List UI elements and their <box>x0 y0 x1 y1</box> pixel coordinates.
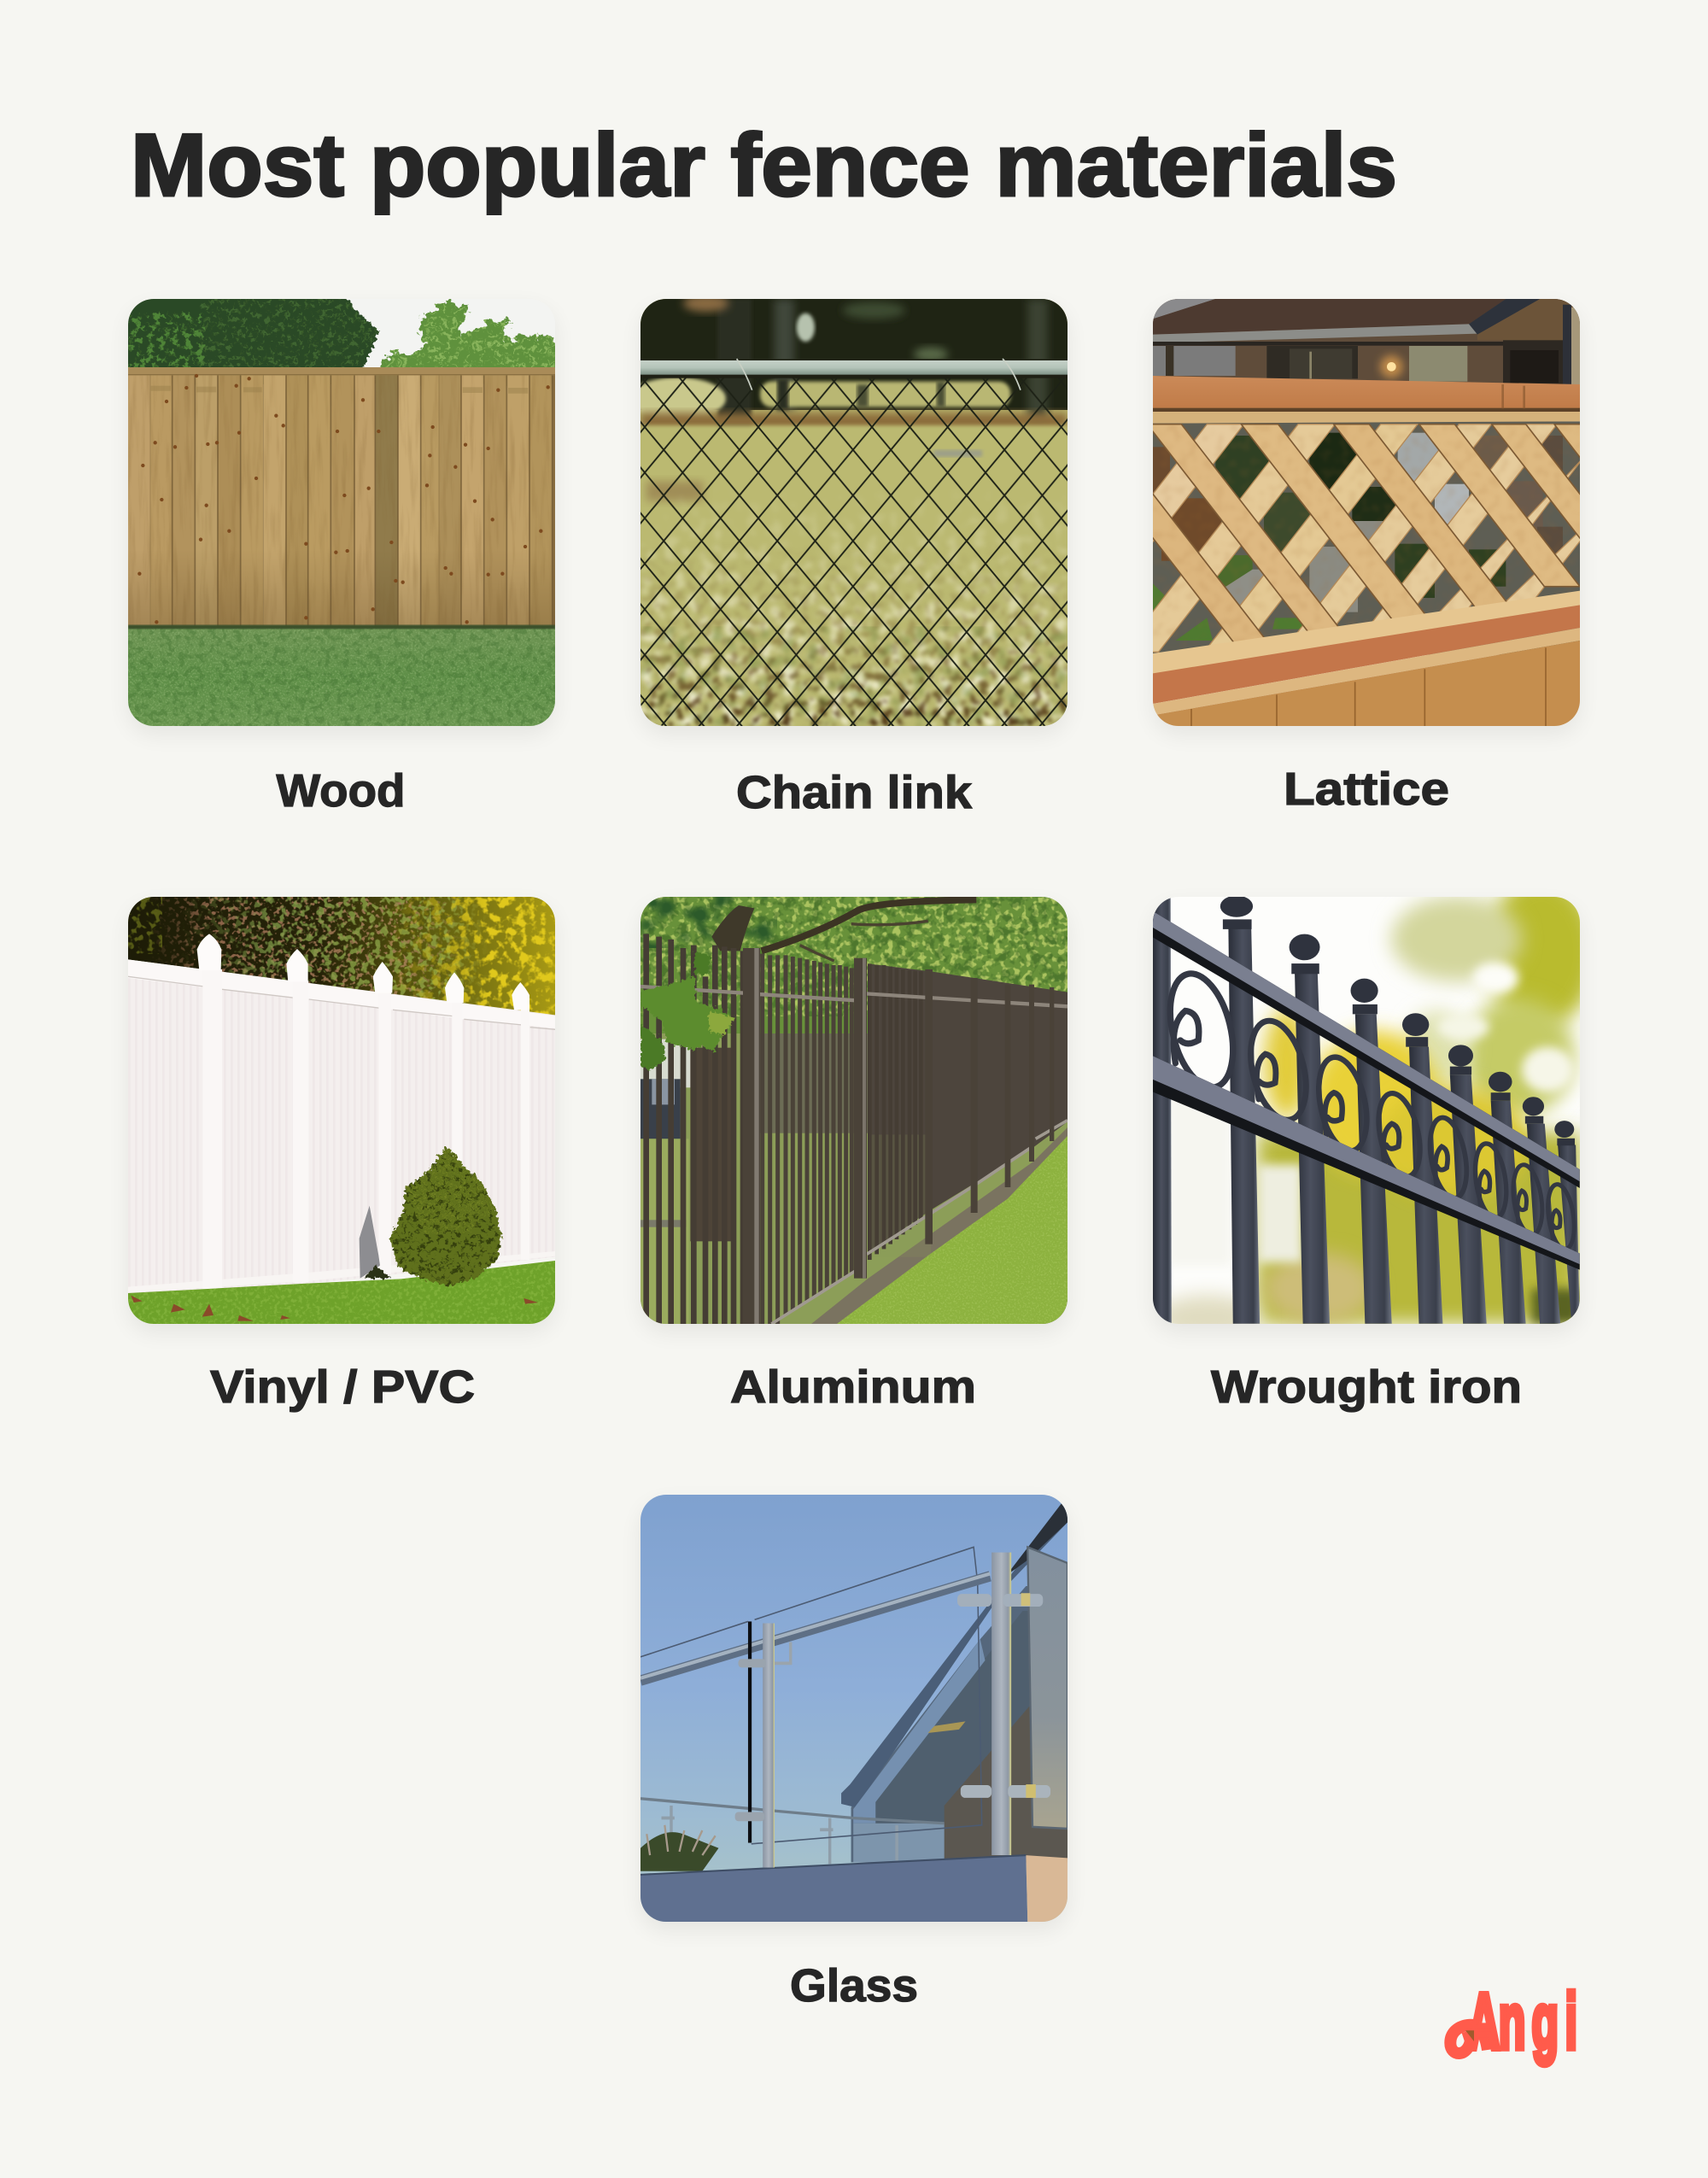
upper rail <box>1153 911 1580 1188</box>
fence posts and caps <box>197 934 529 1291</box>
lattice grain <box>1153 424 1580 652</box>
foliage <box>128 897 555 1019</box>
light trees <box>370 301 566 384</box>
lattice boards running up-right <box>1031 421 1642 652</box>
photo: wood fence <box>128 299 555 726</box>
blurred background <box>629 295 1068 726</box>
sky <box>640 1495 1068 1922</box>
lawn <box>128 1261 555 1324</box>
photo: lattice fence <box>1153 299 1580 726</box>
panel: vinyl fence <box>128 897 555 1413</box>
label: Glass: Glass <box>790 1960 918 2011</box>
scrolls <box>1160 967 1578 1251</box>
wood knots <box>139 376 548 622</box>
panel: chain link fence <box>640 299 1068 818</box>
photo: wrought iron fence <box>1153 897 1580 1324</box>
left post <box>763 1623 775 1868</box>
ground behind fence <box>640 1033 1068 1324</box>
building <box>841 1501 1068 1862</box>
panel: aluminum fence <box>640 897 1068 1413</box>
lawn <box>128 625 555 726</box>
photo: vinyl fence <box>128 897 555 1324</box>
glass pane right <box>1027 1547 1068 1829</box>
house background <box>1153 299 1580 384</box>
posts <box>743 948 1054 1324</box>
lattice boards running down-right <box>1065 424 1637 652</box>
photo: glass fence <box>640 1495 1068 1922</box>
wire mesh <box>640 376 1068 726</box>
shrub <box>365 1146 501 1286</box>
glass clamps <box>735 1593 1050 1821</box>
top rail <box>640 359 1068 390</box>
top rail <box>640 987 1068 1006</box>
tree canopy <box>640 897 1068 1045</box>
leaves <box>640 951 734 1070</box>
hook bracket <box>775 1642 791 1663</box>
pickets right <box>869 963 921 1260</box>
panel: glass fence <box>640 1495 1068 2011</box>
pickets middle <box>763 954 851 1324</box>
glass pane outline <box>640 1547 982 1844</box>
fence body <box>128 959 555 1294</box>
right post <box>991 1553 1011 1855</box>
shadow on fence <box>360 1206 380 1279</box>
label: Aluminum: Aluminum <box>730 1361 976 1413</box>
top rail <box>1153 376 1580 424</box>
parapet <box>640 1855 1068 1922</box>
handrail <box>640 1573 990 1681</box>
grass and gravel <box>811 1127 1068 1324</box>
label: Vinyl / PVC: Vinyl / PVC <box>210 1361 475 1413</box>
label: Lattice: Lattice <box>1284 764 1449 815</box>
blurred foliage background <box>1153 877 1597 1341</box>
photo: aluminum fence <box>640 897 1068 1324</box>
lower rail <box>1153 1056 1580 1270</box>
fence boards <box>128 367 555 628</box>
pickets <box>1153 897 1580 1324</box>
bottom rail <box>1153 605 1580 726</box>
label: Chain link: Chain link <box>736 767 973 818</box>
bottom rail <box>771 1121 1068 1324</box>
left glass edge <box>748 1621 752 1843</box>
solid fence run <box>869 963 1068 1253</box>
far railing <box>640 1799 945 1870</box>
pickets <box>646 934 743 1324</box>
photo: chain link fence <box>640 299 1068 726</box>
title: Most popular fence materials <box>131 116 1397 215</box>
lattice lower cover <box>1150 591 1580 698</box>
panel: wrought iron fence <box>1153 897 1580 1413</box>
panel: lattice fence <box>1153 299 1580 815</box>
label: Wood: Wood <box>277 765 405 817</box>
picket finials <box>1220 895 1575 1145</box>
plant <box>640 1825 718 1871</box>
logo: Angi: Angi <box>1468 1977 1577 2065</box>
dark tree canopy <box>117 288 378 384</box>
label: Wrought iron: Wrought iron <box>1211 1361 1522 1413</box>
panel: wood fence <box>128 299 555 817</box>
background through lattice <box>1153 421 1580 655</box>
